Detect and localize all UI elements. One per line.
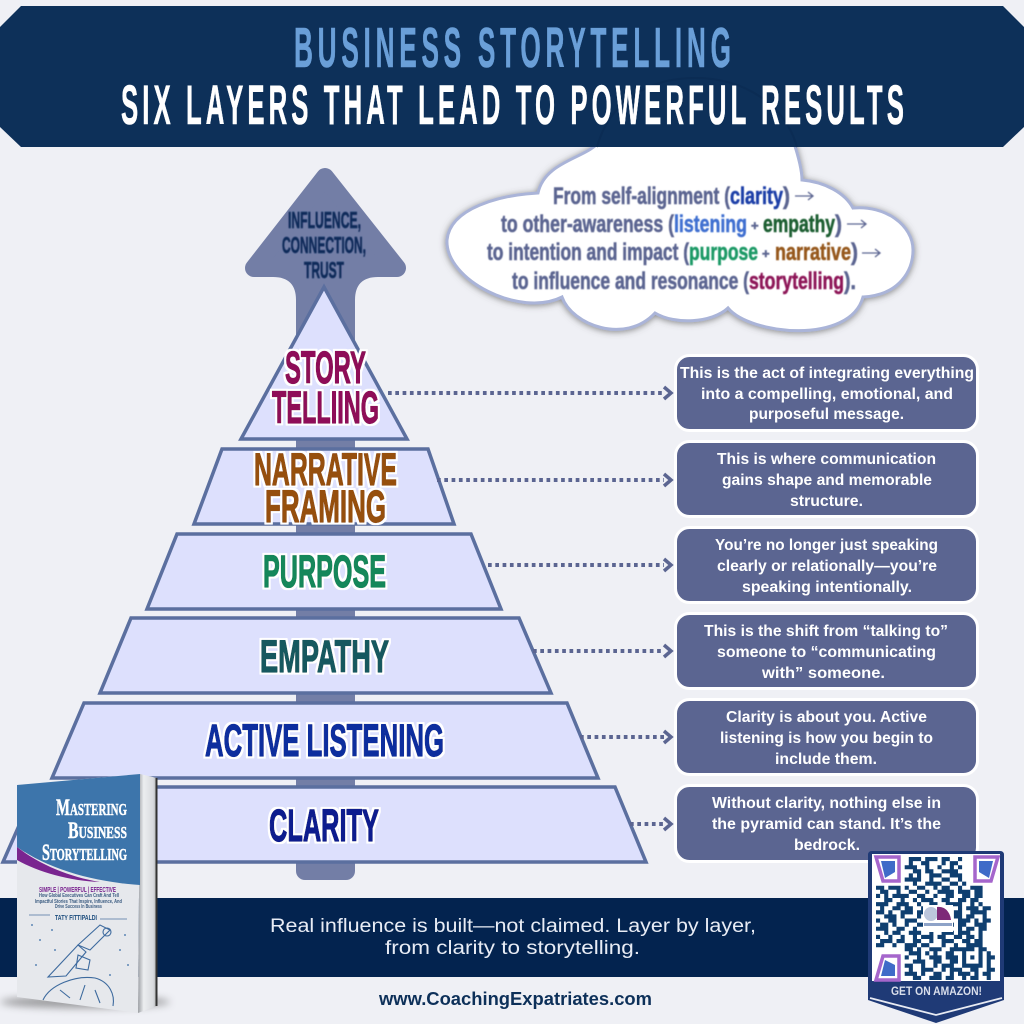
book title: BUSINESS xyxy=(68,818,127,843)
connector: storytelling xyxy=(388,387,671,399)
dotted connectors xyxy=(388,387,671,830)
box: purpose xyxy=(676,528,978,602)
cloud text: empathy xyxy=(763,211,835,238)
cloud text: ) xyxy=(783,183,790,210)
connector: empathy xyxy=(533,645,671,657)
QR finder squares xyxy=(876,857,998,980)
layer: narrative framing xyxy=(194,449,454,524)
label: clarity: CLARITY xyxy=(269,800,379,851)
box: clarity xyxy=(676,786,978,862)
book title: MASTERING xyxy=(56,795,127,820)
label: active listening: ACTIVE LISTENING xyxy=(205,715,444,766)
book: Impactful Stories That Inspire, Influence, And xyxy=(35,899,122,905)
box: listening: listening is how you begin to xyxy=(720,730,933,747)
book: Drive Success In Business xyxy=(55,904,102,910)
book author: TATY FITTIPALDI xyxy=(55,915,97,922)
cloud text: to other-awareness ( xyxy=(501,211,674,238)
title line 2: SIX LAYERS THAT LEAD TO POWERFUL RESULTS xyxy=(121,75,904,137)
box: narrative: gains shape and memorable xyxy=(722,472,932,489)
box: empathy: someone to “communicating xyxy=(717,644,936,661)
book cover xyxy=(17,774,140,1013)
badge caption: GET ON AMAZON! xyxy=(891,986,982,998)
layer: active listening xyxy=(52,703,598,778)
label: empathy: EMPATHY xyxy=(260,631,389,682)
label: purpose: PURPOSE xyxy=(263,546,386,597)
description boxes xyxy=(676,356,978,862)
box: storytelling: purposeful message. xyxy=(749,406,904,423)
cloud text: storytelling xyxy=(749,268,844,295)
pyramid labels xyxy=(205,342,444,851)
footer message: from clarity to storytelling. xyxy=(385,938,640,959)
box: purpose: speaking intentionally. xyxy=(742,579,912,596)
badge chevron xyxy=(870,998,1002,1015)
layer: clarity xyxy=(3,787,646,862)
layer: storytelling xyxy=(241,287,407,439)
box: storytelling xyxy=(676,356,978,430)
connector: clarity xyxy=(630,818,671,830)
cloud text: to intention and impact ( xyxy=(487,239,689,266)
arrow text xyxy=(282,207,366,283)
connector: narrative xyxy=(437,474,671,486)
box: narrative: structure. xyxy=(790,493,863,510)
box: clarity: the pyramid can stand. It’s the xyxy=(712,816,941,833)
box: listening xyxy=(676,700,978,774)
box: narrative xyxy=(676,442,978,516)
box: empathy: This is the shift from “talking to” xyxy=(704,623,948,640)
book pages xyxy=(138,774,157,1013)
box: storytelling: This is the act of integrating everything xyxy=(680,365,974,382)
footer band xyxy=(0,898,1024,977)
cloud text: purpose xyxy=(689,239,758,266)
label: telliing: TELLIING xyxy=(272,382,379,433)
layer: purpose xyxy=(147,534,501,609)
pyramid xyxy=(3,287,646,862)
label: framing: FRAMING xyxy=(265,481,386,532)
cloud text: clarity xyxy=(730,183,783,210)
box: purpose: clearly or relationally—you’re xyxy=(717,558,937,575)
box: purpose: You’re no longer just speaking xyxy=(715,537,938,554)
header banner xyxy=(0,6,1024,147)
website url: www.CoachingExpatriates.com xyxy=(378,989,652,1009)
connector: listening xyxy=(580,731,671,743)
arrow text: CONNECTION, xyxy=(282,232,366,258)
book: How Global Executives Can Craft And Tell xyxy=(39,893,119,899)
book illustration xyxy=(43,925,113,1006)
connector: purpose xyxy=(488,559,671,571)
label: story: STORY xyxy=(285,342,366,393)
box: clarity: Without clarity, nothing else in xyxy=(712,795,941,812)
cloud text: narrative xyxy=(775,239,851,266)
cloud text: ). xyxy=(844,268,856,295)
book xyxy=(0,774,170,1013)
title line 1: BUSINESS STORYTELLING xyxy=(294,17,731,80)
box: listening: include them. xyxy=(775,751,877,768)
arrow text: TRUST xyxy=(304,257,344,283)
arrow text: INFLUENCE, xyxy=(288,207,361,233)
cloud xyxy=(447,140,913,331)
box: storytelling: into a compelling, emotional, and xyxy=(701,386,953,403)
QR logo xyxy=(923,905,953,932)
book subtitle: SIMPLE | POWERFUL | EFFECTIVE xyxy=(39,885,116,894)
QR code xyxy=(876,859,995,978)
box: narrative: This is where communication xyxy=(717,451,936,468)
badge body xyxy=(868,851,1004,1023)
QR badge xyxy=(868,851,1004,1023)
growth arrow xyxy=(254,177,397,871)
box: clarity: bedrock. xyxy=(794,837,860,854)
cloud text: + xyxy=(751,218,759,233)
label: narrative: NARRATIVE xyxy=(254,444,397,495)
book title xyxy=(42,795,127,865)
cloud text: + xyxy=(762,246,770,261)
cloud text: to influence and resonance ( xyxy=(512,268,749,295)
cloud text: ) xyxy=(851,239,858,266)
book title: STORYTELLING xyxy=(42,840,127,865)
cloud text: listening xyxy=(674,211,747,238)
book shadow xyxy=(0,996,170,1008)
cloud text: From self-alignment ( xyxy=(553,183,730,210)
cloud text xyxy=(487,183,880,295)
box: empathy xyxy=(676,614,978,688)
footer message xyxy=(270,916,756,959)
box: listening: Clarity is about you. Active xyxy=(726,709,927,726)
footer message: Real influence is built—not claimed. Layer by layer, xyxy=(270,916,756,937)
layer: empathy xyxy=(100,618,551,693)
cloud text: ) xyxy=(835,211,842,238)
box: empathy: with” someone. xyxy=(761,665,885,682)
